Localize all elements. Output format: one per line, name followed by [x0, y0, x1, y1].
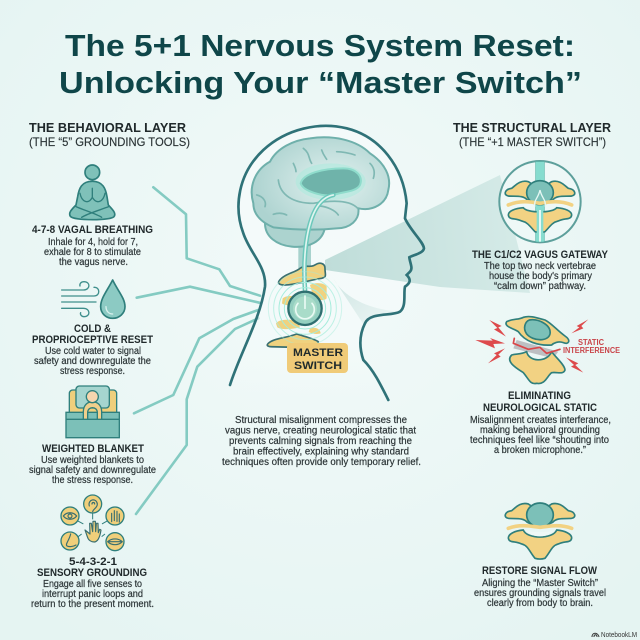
- central explanation text: vagus nerve, creating neurological static that: [225, 426, 416, 436]
- central explanation text: prevents calming signals from reaching the: [229, 436, 412, 447]
- master switch label: SWITCH: [294, 360, 342, 372]
- text: weighted blanket: signal safety and downregulate: [29, 465, 156, 476]
- label: static interference: INTERFERENCE: [563, 346, 621, 355]
- text: C1/C2 vagus gateway: [472, 249, 609, 292]
- icon: aligned vertebrae: [505, 503, 575, 559]
- text: 4-7-8 vagal breathing: [32, 224, 153, 268]
- text: C1/C2 vagus gateway: “calm down” pathway.: [494, 281, 586, 292]
- text: 4-7-8 vagal breathing: the vagus nerve.: [59, 257, 128, 268]
- text: cold and proprioceptive reset: COLD &: [74, 323, 111, 335]
- text: C1/C2 vagus gateway: THE C1/C2 VAGUS GATEWAY: [472, 249, 609, 261]
- neck vertebrae: [267, 263, 327, 350]
- central explanation text: [222, 415, 421, 468]
- icon: C1/C2 vertebrae in circle: [499, 161, 581, 242]
- panel: structural layer: [453, 121, 621, 609]
- text: 5-4-3-2-1 sensory grounding: SENSORY GROUNDING: [37, 567, 147, 579]
- text: 4-7-8 vagal breathing: 4-7-8 VAGAL BREATHING: [32, 224, 153, 236]
- text: cold and proprioceptive reset: Use cold water to signal: [45, 346, 141, 357]
- text: 5-4-3-2-1 sensory grounding: return to the present moment.: [31, 599, 154, 610]
- heading: behavioral layer: (THE “5” GROUNDING TOOLS): [29, 135, 190, 149]
- heading: behavioral layer: THE BEHAVIORAL LAYER: [29, 121, 186, 135]
- central explanation text: Structural misalignment compresses the: [235, 415, 407, 426]
- text: eliminating neurological static: NEUROLOGICAL STATIC: [483, 402, 597, 414]
- text: eliminating neurological static: [470, 390, 611, 456]
- text: weighted blanket: [29, 443, 156, 486]
- text: cold and proprioceptive reset: stress response.: [60, 366, 125, 377]
- text: restore signal flow: Aligning the “Master Switch”: [482, 578, 598, 589]
- text: 5-4-3-2-1 sensory grounding: interrupt panic loops and: [42, 589, 143, 600]
- vagus nerve: [304, 195, 333, 290]
- icon: meditating figure: [70, 165, 115, 220]
- icon: power button master switch: [268, 272, 342, 345]
- connector lines from behavioral tools to neck: [134, 187, 260, 514]
- central explanation text: brain effectively, explaining why standard: [233, 446, 409, 458]
- text: weighted blanket: Use weighted blankets to: [41, 455, 144, 466]
- text: restore signal flow: RESTORE SIGNAL FLOW: [482, 565, 598, 577]
- text: eliminating neurological static: Misalignment creates interferance,: [470, 415, 611, 426]
- head outline: [230, 126, 424, 400]
- icon: person under weighted blanket: [66, 386, 119, 438]
- icon: five senses around a hand: [61, 495, 124, 551]
- text: cold and proprioceptive reset: [32, 323, 153, 377]
- text: cold and proprioceptive reset: safety and downregulate the: [34, 356, 151, 367]
- master switch label: [287, 343, 348, 373]
- icon: misaligned vertebrae with static: [475, 317, 588, 384]
- text: restore signal flow: clearly from body to brain.: [487, 598, 593, 609]
- text: 5-4-3-2-1 sensory grounding: 5-4-3-2-1: [69, 556, 117, 568]
- heading: structural layer: [453, 121, 611, 149]
- heading: behavioral layer: [29, 121, 190, 149]
- text: weighted blanket: the stress response.: [52, 475, 133, 486]
- text: 5-4-3-2-1 sensory grounding: [31, 556, 154, 610]
- head silhouette: [230, 126, 424, 400]
- master switch label: MASTER: [293, 347, 343, 359]
- label: static interference: [563, 338, 621, 355]
- panel: central head diagram: [230, 126, 530, 400]
- text: C1/C2 vagus gateway: The top two neck vertebrae: [484, 261, 596, 272]
- text: 5-4-3-2-1 sensory grounding: Engage all five senses to: [43, 579, 142, 590]
- text: eliminating neurological static: techniques feel like “shouting into: [470, 435, 609, 446]
- text: restore signal flow: ensures grounding signals travel: [474, 588, 606, 599]
- icon: wind and water drop: [62, 280, 125, 318]
- watermark: NotebookLM: NotebookLM: [601, 632, 637, 639]
- text: eliminating neurological static: ELIMINATING: [508, 390, 571, 402]
- heading: structural layer: (THE “+1 MASTER SWITCH”): [459, 135, 606, 149]
- label: static interference: STATIC: [578, 338, 604, 347]
- title: [59, 28, 582, 100]
- light wedge from neck to gateway icon: [325, 175, 530, 293]
- text: eliminating neurological static: a broken microphone.”: [494, 445, 586, 456]
- text: 4-7-8 vagal breathing: Inhale for 4, hold for 7,: [48, 237, 138, 248]
- text: 4-7-8 vagal breathing: exhale for 8 to stimulate: [44, 247, 141, 258]
- central explanation text: techniques often provide only temporary relief.: [222, 457, 421, 468]
- text: eliminating neurological static: making behavioral grounding: [480, 425, 600, 436]
- text: weighted blanket: WEIGHTED BLANKET: [42, 443, 144, 455]
- brain: [252, 137, 389, 268]
- heading: structural layer: THE STRUCTURAL LAYER: [453, 121, 611, 135]
- text: C1/C2 vagus gateway: house the body's primary: [489, 271, 592, 282]
- text: cold and proprioceptive reset: PROPRIOCEPTIVE RESET: [32, 334, 153, 346]
- title: Unlocking Your “Master Switch”: [59, 65, 582, 100]
- title: The 5+1 Nervous System Reset:: [65, 28, 575, 63]
- panel: behavioral layer: [29, 121, 190, 610]
- text: restore signal flow: [474, 565, 606, 609]
